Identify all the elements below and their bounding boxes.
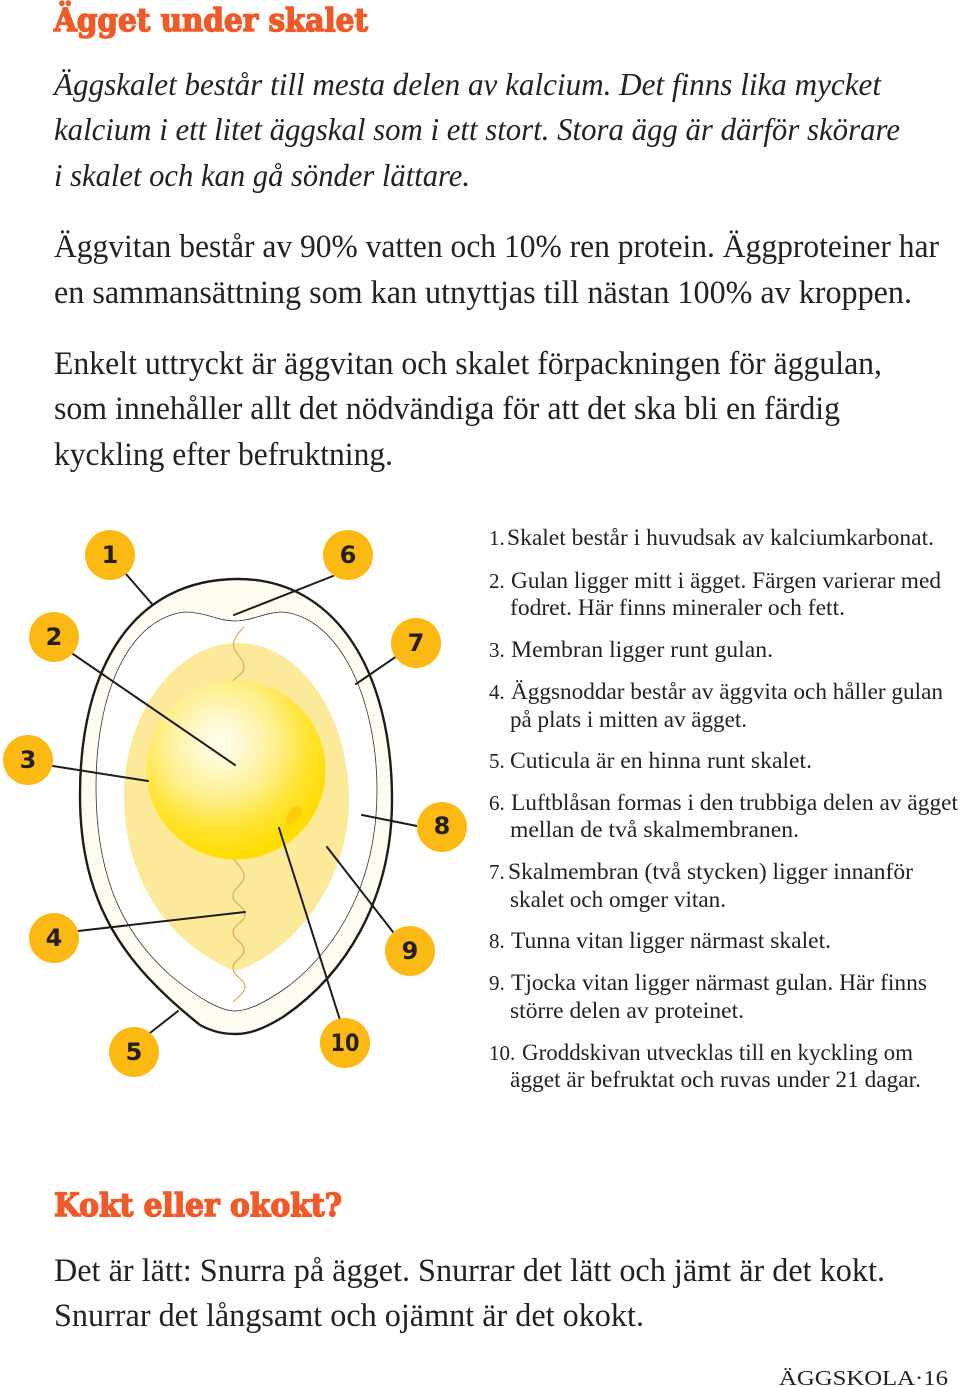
badge 6 <box>323 530 373 580</box>
legend item 10: ägget är befruktat och ruvas under 21 dagar. <box>510 1067 921 1092</box>
badge 4: 4 <box>46 924 62 952</box>
badge 4 <box>29 913 79 963</box>
legend item 6: mellan de två skalmembranen. <box>510 817 799 842</box>
chalaza upper <box>233 627 244 681</box>
yolk <box>146 680 326 860</box>
intro text: eggshell: i skalet och kan gå sönder lättare. <box>54 157 470 193</box>
badge 5: 5 <box>126 1038 142 1066</box>
badge 5 <box>109 1027 159 1077</box>
legend item 10: 10. <box>489 1041 515 1065</box>
badge 2: 2 <box>46 623 62 651</box>
text: packaging <box>54 346 882 473</box>
legend item 1: 1. <box>489 526 505 550</box>
legend item 6 <box>489 790 959 842</box>
legend item 7 <box>489 859 913 912</box>
text: egg white: en sammansättning som kan utnyttjas till nästan 100% av kroppen. <box>54 275 912 311</box>
leader lines <box>53 574 417 1033</box>
numbered legend <box>489 525 959 1092</box>
badge 7 <box>391 618 441 668</box>
badge 8: 8 <box>434 812 450 840</box>
title: Ägget under skalet <box>53 1 368 39</box>
legend item 8: 8. <box>489 929 505 953</box>
legend item 9: större delen av proteinet. <box>510 998 744 1023</box>
legend item 4: 4. <box>489 680 505 704</box>
badge 10 <box>320 1018 370 1068</box>
legend item 10 <box>489 1040 921 1092</box>
badge 9: 9 <box>402 937 418 965</box>
badge 7: 7 <box>408 629 424 657</box>
legend item 7: Skalmembran (två stycken) ligger innanför <box>508 859 913 884</box>
badge 3: 3 <box>20 746 36 774</box>
legend item 1: Skalet består i huvudsak av kalciumkarbonat. <box>507 525 934 550</box>
shell membrane <box>96 612 377 1011</box>
text: egg white: Äggvitan består av 90% vatten och 10% ren protein. Äggproteiner har <box>54 229 939 265</box>
legend item 3: Membran ligger runt gulan. <box>511 637 773 662</box>
chalaza lower <box>233 859 245 1002</box>
legend item 4 <box>489 679 943 732</box>
badge 3 <box>3 735 53 785</box>
egg shell <box>80 579 392 1034</box>
legend item 2: fodret. Här finns mineraler och fett. <box>510 595 845 620</box>
heading: boiled or raw: Kokt eller okokt? <box>54 1186 342 1224</box>
badge 1 <box>85 530 135 580</box>
legend item 2 <box>489 568 941 620</box>
text: packaging: som innehåller allt det nödvändiga för att det ska bli en färdig <box>54 391 840 427</box>
egg diagram <box>3 530 467 1077</box>
legend item 7: 7. <box>489 860 505 884</box>
intro text: eggshell: Äggskalet består till mesta delen av kalcium. Det finns lika mycket <box>52 66 882 102</box>
legend item 4: Äggsnoddar består av äggvita och håller gulan <box>511 679 943 704</box>
text: spin the egg <box>54 1253 885 1334</box>
thick albumen <box>124 643 349 971</box>
badge 10: 10 <box>330 1029 360 1057</box>
legend item 6: 6. <box>489 791 505 815</box>
text: spin the egg: Snurrar det långsamt och ojämnt är det okokt. <box>54 1298 644 1334</box>
text: spin the egg: Det är lätt: Snurra på ägget. Snurrar det lätt och jämt är det kokt. <box>54 1253 885 1289</box>
text: packaging: kyckling efter befruktning. <box>54 437 393 473</box>
legend item 3: 3. <box>489 638 505 662</box>
badge 9 <box>385 926 435 976</box>
legend item 9: Tjocka vitan ligger närmast gulan. Här finns <box>511 970 927 995</box>
badge 6: 6 <box>340 541 356 569</box>
badge 2 <box>29 612 79 662</box>
text: packaging: Enkelt uttryckt är äggvitan och skalet förpackningen för äggulan, <box>54 346 882 382</box>
badge 8 <box>417 802 467 852</box>
legend item 9: 9. <box>489 971 505 995</box>
legend item 4: på plats i mitten av ägget. <box>510 707 747 732</box>
intro text: eggshell: kalcium i ett litet äggskal som i ett stort. Stora ägg är därför skörare <box>54 111 900 147</box>
legend item 2: 2. <box>489 569 505 593</box>
legend item 8: Tunna vitan ligger närmast skalet. <box>511 928 831 953</box>
legend item 10: Groddskivan utvecklas till en kyckling om <box>522 1040 913 1065</box>
text: egg white <box>54 229 939 311</box>
legend item 5: Cuticula är en hinna runt skalet. <box>510 748 812 773</box>
legend item 6: Luftblåsan formas i den trubbiga delen av ägget <box>511 790 959 815</box>
badge 1: 1 <box>102 541 118 569</box>
legend item 9 <box>489 970 927 1023</box>
legend item 7: skalet och omger vitan. <box>510 887 726 912</box>
intro text: eggshell <box>52 66 900 193</box>
legend item 2: Gulan ligger mitt i ägget. Färgen varierar med <box>511 568 941 593</box>
legend item 5: 5. <box>489 749 505 773</box>
germinal disc <box>283 803 305 827</box>
